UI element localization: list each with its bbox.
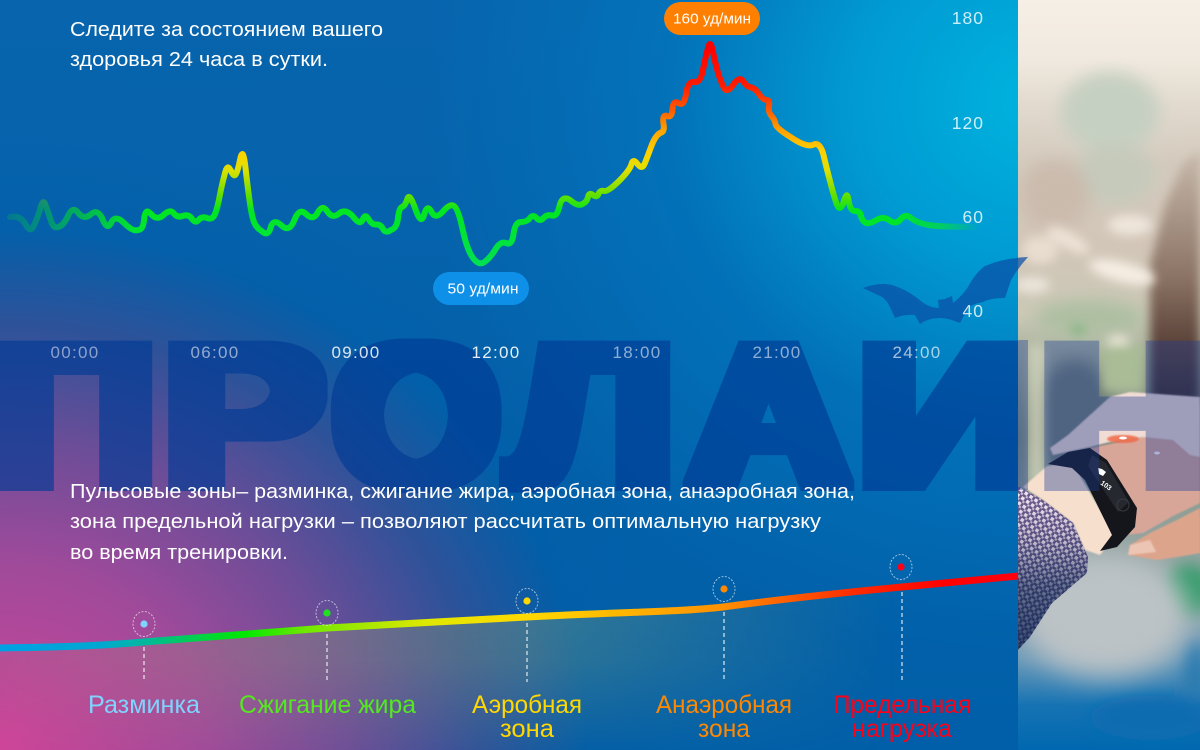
y axis labels: 120 — [952, 113, 984, 133]
intro text: Следите за состоянием вашего — [70, 18, 383, 41]
fitness band — [1048, 448, 1137, 551]
watermark letters on gradient: П — [0, 303, 156, 530]
zone label: anaerobic — [656, 691, 792, 743]
x axis labels — [50, 343, 942, 362]
icon: bat logo — [863, 257, 1028, 324]
intro text: здоровья 24 часа в сутки. — [70, 48, 328, 71]
min pulse pill: 50 уд/мин — [448, 280, 518, 298]
zone label: anaerobic: зона — [698, 715, 750, 743]
max pulse pill — [664, 2, 760, 35]
watermark letters on gradient: Р — [163, 301, 325, 530]
hand and back of palm — [1023, 392, 1200, 560]
band screen heart — [1098, 468, 1106, 476]
zone marker: warm-up — [133, 612, 155, 682]
watermark letters on gradient: И — [857, 301, 1034, 529]
zone label: warm-up: Разминка — [88, 691, 200, 719]
heart rate curve — [10, 44, 983, 263]
zone marker: aerobic — [516, 588, 538, 682]
x axis labels: 21:00 — [752, 343, 802, 362]
tree trunk — [1150, 150, 1200, 405]
zone label: aerobic: Аэробная — [472, 691, 582, 719]
pulse zones description — [70, 480, 855, 564]
x axis labels: 06:00 — [190, 343, 240, 362]
zone label: aerobic: зона — [500, 715, 554, 743]
mist — [1020, 553, 1190, 677]
zone marker: peak load — [890, 554, 912, 680]
watermark letters on gradient: А — [688, 302, 849, 530]
zones gradient curve — [0, 576, 1018, 648]
x axis labels: 24:00 — [892, 343, 942, 362]
watermark letters on gradient — [0, 338, 1018, 493]
watermark letters on gradient: О — [333, 303, 500, 530]
pulse zones chart — [0, 554, 1018, 743]
watermark letters on photo — [1018, 340, 1200, 491]
wrist photo panel — [1014, 0, 1200, 750]
x axis labels: 12:00 — [471, 343, 521, 362]
zone marker: fat burn — [316, 600, 338, 682]
pulse zones description: во время тренировки. — [70, 541, 288, 564]
watermark letters on gradient: Л — [509, 301, 675, 529]
zone label: anaerobic: Анаэробная — [656, 691, 792, 719]
band screen reading: 103 — [1099, 480, 1113, 492]
watermark: ПРОЛАЙН — [0, 338, 1200, 493]
zone label: peak load: Предельная — [833, 691, 971, 719]
y axis labels: 180 — [952, 8, 984, 28]
zone label: aerobic — [472, 691, 582, 743]
zone label: peak load: нагрузка — [852, 715, 952, 743]
zone label: fat burn: Сжигание жира — [239, 691, 416, 719]
y axis labels — [952, 8, 984, 321]
pulse zones description: зона предельной нагрузки – позволяют рассчитать оптимальную нагрузку — [70, 510, 822, 533]
x axis labels: 09:00 — [331, 343, 381, 362]
pulse zones description: Пульсовые зоны– разминка, сжигание жира, аэробная зона, анаэробная зона, — [70, 480, 855, 503]
patterned sleeve — [1018, 486, 1088, 650]
max pulse pill: 160 уд/мин — [673, 10, 751, 28]
x axis labels: 18:00 — [612, 343, 662, 362]
heart rate line chart — [10, 2, 984, 362]
x axis labels: 00:00 — [50, 343, 100, 362]
y axis labels: 60 — [963, 207, 984, 227]
intro text — [70, 18, 383, 71]
zone marker: anaerobic — [713, 576, 735, 682]
zone label: peak load — [833, 691, 971, 743]
min pulse pill — [433, 272, 529, 305]
y axis labels: 40 — [963, 301, 984, 321]
area tint under zone curve — [14, 598, 831, 740]
